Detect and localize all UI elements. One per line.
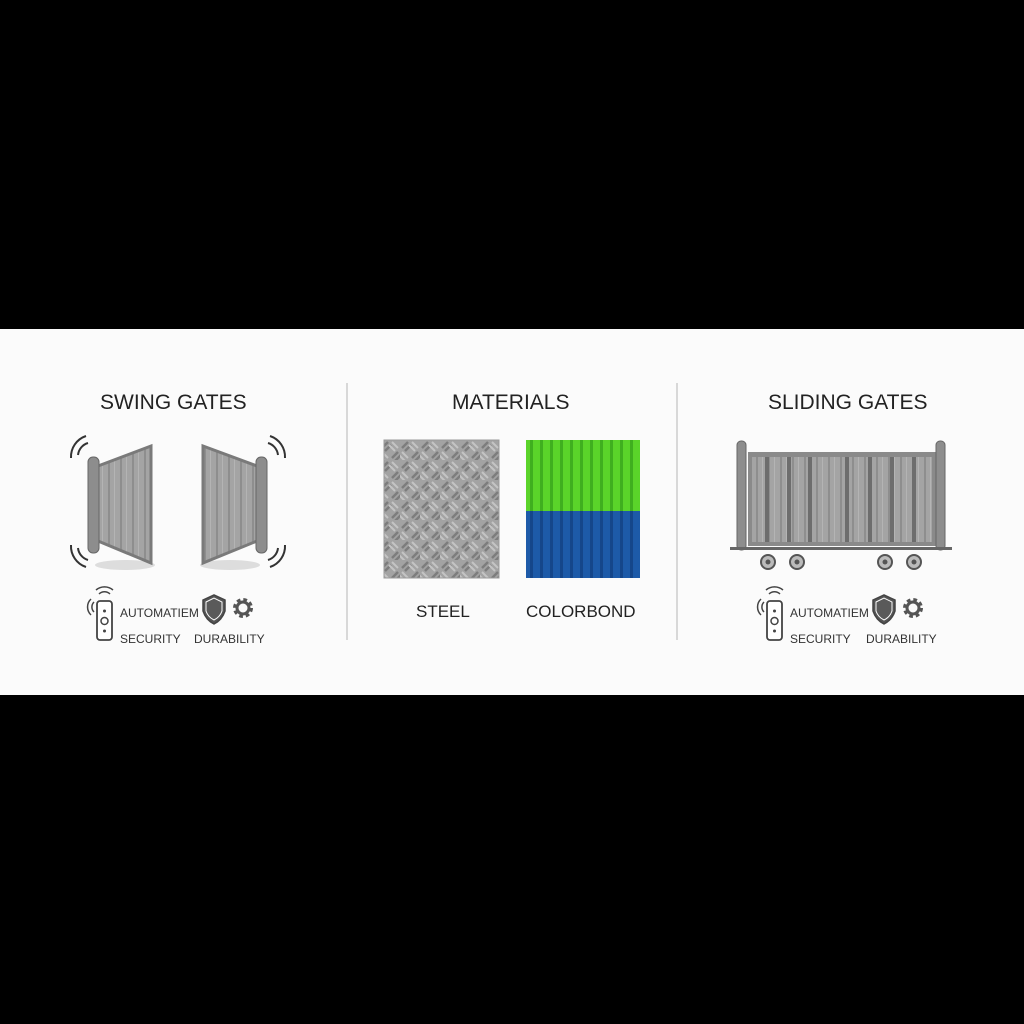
features right: DURABILITY — [866, 632, 937, 646]
features right: SECURITY — [790, 632, 851, 646]
heading: sliding gates: SLIDING GATES — [768, 391, 927, 414]
features left: SECURITY — [120, 632, 181, 646]
heading: materials: MATERIALS — [452, 391, 569, 414]
features left: AUTOMATIEM — [120, 606, 199, 620]
heading: swing gates: SWING GATES — [100, 391, 247, 414]
icon row left: remote, shield, gear — [88, 587, 251, 640]
features right — [790, 606, 937, 646]
features right: AUTOMATIEM — [790, 606, 869, 620]
icon row right — [758, 587, 920, 640]
icon: swing gates — [71, 436, 285, 570]
image: colorbond sheet — [526, 440, 640, 578]
features left — [120, 606, 265, 646]
label: steel: STEEL — [416, 602, 470, 621]
label: colorbond: COLORBOND — [526, 602, 636, 621]
image: steel tread plate — [384, 440, 499, 578]
divider lines — [346, 383, 348, 640]
icon: sliding gate — [730, 441, 952, 569]
panel: infographic band — [0, 329, 1024, 695]
features left: DURABILITY — [194, 632, 265, 646]
